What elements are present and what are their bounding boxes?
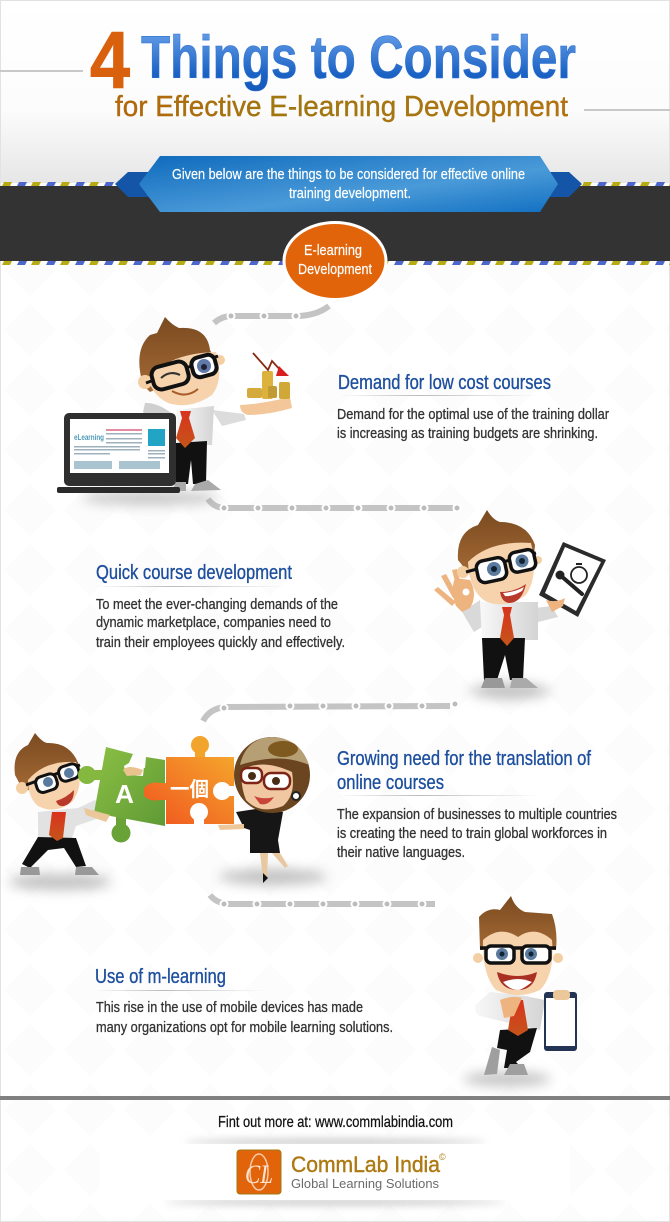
icon: orange puzzle piece with Chinese characters xyxy=(144,736,234,824)
text block: Use of m-learning xyxy=(95,966,393,1036)
text block: Quick course development xyxy=(96,562,345,651)
connector path 3 xyxy=(203,700,458,721)
logo: CommLab India: Global Learning Solutions xyxy=(291,1176,439,1191)
head xyxy=(479,896,556,950)
connector path 4 xyxy=(210,895,435,908)
text block: Demand for low cost courses: Demand for the optimal use of the training dollar xyxy=(337,406,609,423)
illustration: man with tablet showing timer and wrench xyxy=(434,510,606,699)
banner ribbon xyxy=(115,156,582,212)
text block: Quick course development: Quick course development xyxy=(96,562,292,584)
text block: Growing need for the translation of online courses: Growing need for the translation of xyxy=(337,748,591,770)
icon: green puzzle piece with letter A xyxy=(78,747,165,842)
hub circle: E-learning Development: Development xyxy=(298,261,373,278)
connector path 1 xyxy=(214,306,329,323)
text block: Growing need for the translation of online courses: The expansion of businesses to multiple countries xyxy=(337,806,617,823)
body xyxy=(176,406,214,445)
icon: mobile device xyxy=(544,990,577,1051)
icon: laptop: eLearning xyxy=(74,433,104,442)
connector path 2 xyxy=(208,499,460,512)
woman xyxy=(236,808,283,853)
icon: green puzzle piece with letter A: A xyxy=(115,779,134,809)
text block: Growing need for the translation of online courses: online courses xyxy=(337,772,444,794)
footer rule xyxy=(0,1096,670,1100)
footer link text: Fint out more at: www.commlabindia.com xyxy=(218,1114,453,1131)
text block: Demand for low cost courses: Demand for low cost courses xyxy=(338,372,551,394)
hub circle: E-learning Development: E-learning xyxy=(304,242,362,259)
arms xyxy=(143,403,180,430)
title xyxy=(0,16,670,123)
illustration: man and woman joining translation puzzle pieces xyxy=(8,733,327,890)
logo strip shadows xyxy=(100,1139,570,1205)
arm and body xyxy=(475,992,545,1030)
icon: coins and falling arrow xyxy=(247,353,290,399)
logo: CommLab India: © xyxy=(439,1152,446,1162)
logo: CommLab India: CommLab India xyxy=(291,1152,441,1177)
dark band with striped edges xyxy=(0,182,670,265)
title: 4 xyxy=(90,16,130,106)
banner ribbon: training development. xyxy=(289,185,411,202)
text block: Demand for low cost courses xyxy=(337,372,609,442)
header background xyxy=(0,0,670,183)
banner ribbon: Given below are the things to be considered for effective online xyxy=(172,166,525,183)
text block: Use of m-learning: Use of m-learning xyxy=(95,966,226,988)
illustration: smiling man with mobile device xyxy=(463,896,577,1086)
text block: Growing need for the translation of online courses xyxy=(337,748,617,861)
head xyxy=(139,317,216,392)
text block: Growing need for the translation of online courses: their native languages. xyxy=(337,844,465,861)
hub circle: E-learning Development xyxy=(284,222,386,300)
icon: laptop xyxy=(57,413,180,493)
logo: CommLab India: CL xyxy=(245,1160,273,1189)
body xyxy=(480,602,538,640)
text block: Quick course development: dynamic marketplace, companies need to xyxy=(96,614,331,631)
illustration: winking man with laptop and coins xyxy=(57,317,292,505)
text block: Demand for low cost courses: is increasing as training budgets are shrinking. xyxy=(337,425,598,442)
arms xyxy=(462,600,485,632)
hand: OK sign xyxy=(434,569,474,612)
text block: Quick course development: To meet the ever-changing demands of the xyxy=(96,596,338,613)
text block: Quick course development: train their employees quickly and effectively. xyxy=(96,634,345,651)
title: for Effective E-learning Development xyxy=(115,91,568,123)
icon: orange puzzle piece with Chinese characters: 一個 xyxy=(170,773,209,802)
man xyxy=(38,800,108,838)
text block: Use of m-learning: many organizations opt for mobile learning solutions. xyxy=(96,1019,393,1036)
logo: CommLab India xyxy=(237,1150,446,1194)
text block: Growing need for the translation of online courses: is creating the need to train global workforces in xyxy=(337,825,607,842)
text block: Use of m-learning: This rise in the use of mobile devices has made xyxy=(96,999,363,1016)
head xyxy=(458,510,535,575)
icon: tablet with timer and wrench xyxy=(539,542,606,617)
